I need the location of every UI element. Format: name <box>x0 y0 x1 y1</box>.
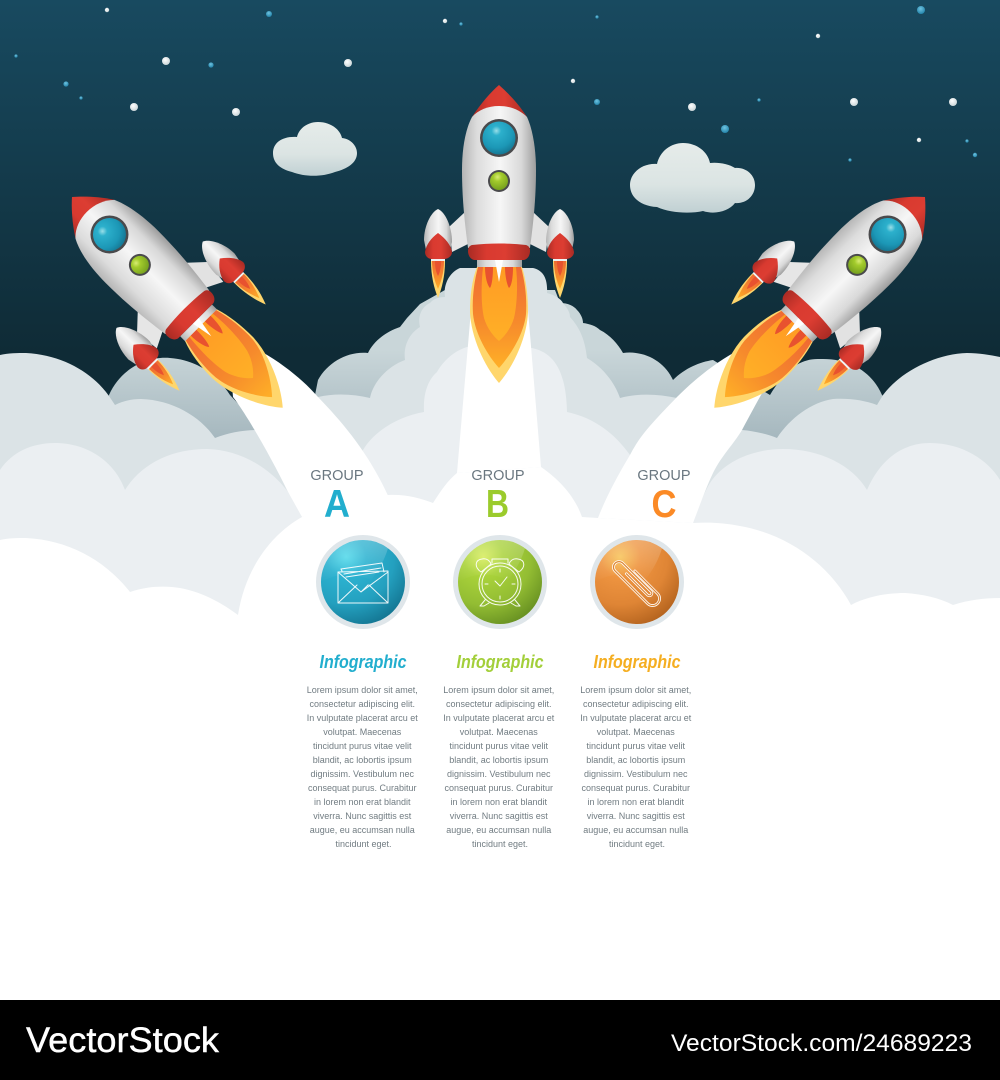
heading: Infographic A: Infographic <box>320 652 406 672</box>
text block: group A description: tincidunt eget. <box>335 839 392 849</box>
night sky background <box>0 0 1000 440</box>
text block: group A description: consectetur adipiscing elit. <box>309 699 415 709</box>
group C heading: GROUP <box>637 468 691 484</box>
text block: group C description: consectetur adipiscing elit. <box>583 699 689 709</box>
text block: group C description: tincidunt purus vitae velit <box>586 741 686 751</box>
text block: group C description: consequat purus. Curabitur <box>581 783 690 793</box>
text block: group A description: tincidunt purus vitae velit <box>313 741 412 751</box>
text block: group B description: in lorem non erat blandit <box>450 797 548 807</box>
text block: group C description: blandit, ac lobortis ipsum <box>586 755 685 765</box>
text block: group B description: blandit, ac lobortis ipsum <box>449 755 548 765</box>
text block: group C description: viverra. Nunc sagittis est <box>587 811 685 821</box>
stars <box>14 6 977 162</box>
text block: group A description: volutpat. Maecenas <box>323 727 402 737</box>
text block: group C description: volutpat. Maecenas <box>597 727 675 737</box>
text block: group B description: augue, eu accumsan nulla <box>446 825 551 835</box>
rocket center <box>424 85 574 383</box>
group C heading: C <box>652 483 676 526</box>
text block: group A description: consequat purus. Curabitur <box>308 783 417 793</box>
cloud layer: back <box>0 290 1000 520</box>
group B heading: B <box>486 483 509 526</box>
icon: envelope badge <box>316 535 410 629</box>
group B heading: GROUP <box>471 468 525 484</box>
cloud layer: third <box>0 347 1000 640</box>
text block: group A description: dignissim. Vestibulum nec <box>310 769 415 779</box>
text block: group B description: tincidunt purus vitae velit <box>449 741 549 751</box>
text block: group B description: consectetur adipiscing elit. <box>446 699 552 709</box>
text block: group B description: consequat purus. Curabitur <box>444 783 553 793</box>
group C heading <box>637 468 691 526</box>
footer bar: VectorStock.com/24689223 <box>671 1030 972 1057</box>
text block: group A description: In vulputate placerat arcu et <box>307 713 418 723</box>
cloud layer: second <box>0 268 1000 520</box>
text block: group B description: Lorem ipsum dolor sit amet, <box>443 685 554 695</box>
text block: group A description: in lorem non erat blandit <box>314 797 411 807</box>
cloud layer: front white with rocket exhaust trails <box>0 310 1000 1000</box>
text block: group C description: augue, eu accumsan nulla <box>583 825 688 835</box>
text block: group B description: volutpat. Maecenas <box>460 727 538 737</box>
sky cloud right <box>630 143 755 213</box>
text block: group C description: tincidunt eget. <box>609 839 665 849</box>
text block: group A description: augue, eu accumsan nulla <box>310 825 415 835</box>
group A heading <box>310 468 364 526</box>
icon: paperclip badge <box>590 535 684 629</box>
text block: group B description: In vulputate placerat arcu et <box>443 713 555 723</box>
group B heading <box>471 468 525 526</box>
group A heading: GROUP <box>310 468 364 484</box>
text block: group C description: dignissim. Vestibulum nec <box>584 769 688 779</box>
text block: group B description: tincidunt eget. <box>472 839 528 849</box>
footer bar: VectorStock <box>26 1021 220 1060</box>
text block: group A description: blandit, ac lobortis ipsum <box>313 755 412 765</box>
text block: group B description: viverra. Nunc sagittis est <box>450 811 548 821</box>
text block: group B description: dignissim. Vestibulum nec <box>447 769 551 779</box>
sky cloud left <box>273 122 357 176</box>
heading: Infographic C: Infographic <box>594 652 680 672</box>
rocket left <box>19 144 336 461</box>
text block: group A description: Lorem ipsum dolor sit amet, <box>307 685 418 695</box>
text block: group C description: In vulputate placerat arcu et <box>580 713 692 723</box>
footer bar <box>0 1000 1000 1080</box>
heading: Infographic B: Infographic <box>456 652 544 672</box>
rocket right <box>661 144 978 461</box>
group A heading: A <box>324 483 350 526</box>
icon: alarm clock badge <box>453 535 547 629</box>
text block: group C description: Lorem ipsum dolor sit amet, <box>580 685 691 695</box>
text block: group C description: in lorem non erat blandit <box>587 797 685 807</box>
text block: group A description: viverra. Nunc sagittis est <box>313 811 412 821</box>
